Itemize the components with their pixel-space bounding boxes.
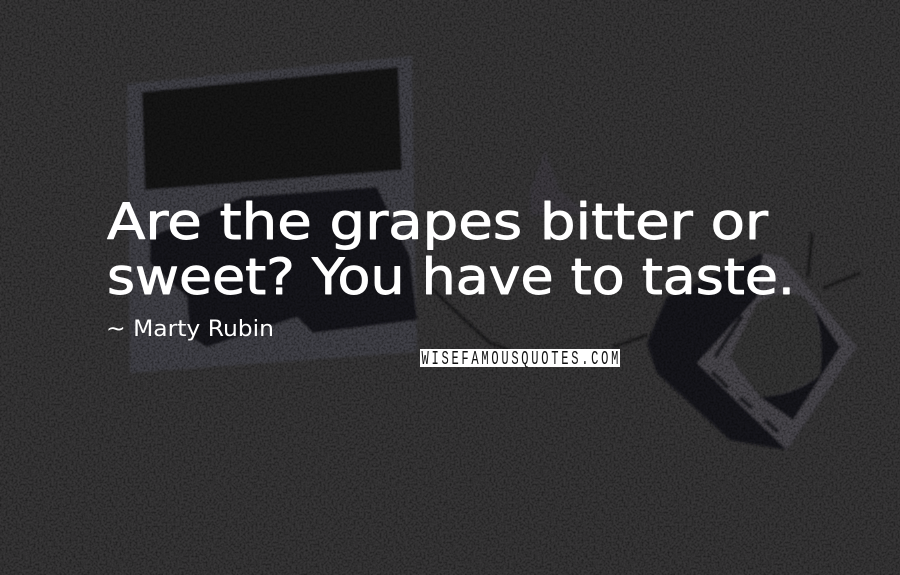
quote line 1: Are the grapes bitter or bbox=[107, 193, 768, 251]
window frame bbox=[127, 56, 417, 373]
watermark text: WISEFAMOUSQUOTES.COM bbox=[422, 347, 621, 370]
television screen bbox=[730, 293, 821, 397]
watermark box bbox=[420, 349, 620, 367]
television vents bbox=[712, 316, 778, 432]
artwork: stencilled window frame bbox=[127, 56, 417, 373]
author attribution: ~ Marty Rubin bbox=[106, 317, 274, 342]
quote line 2: sweet? You have to taste. bbox=[107, 248, 795, 306]
cable bbox=[430, 287, 647, 350]
antennas bbox=[808, 233, 860, 288]
television frame bbox=[697, 253, 857, 450]
quote text bbox=[107, 193, 795, 306]
watermark bbox=[420, 347, 621, 370]
window upper dark pane bbox=[142, 67, 402, 190]
window lower dark shape bbox=[150, 187, 417, 347]
television dark crescent bbox=[760, 297, 840, 420]
television shadow bbox=[647, 254, 857, 450]
artwork: tipped television bbox=[430, 233, 860, 450]
faint ghost mark bbox=[530, 150, 590, 215]
